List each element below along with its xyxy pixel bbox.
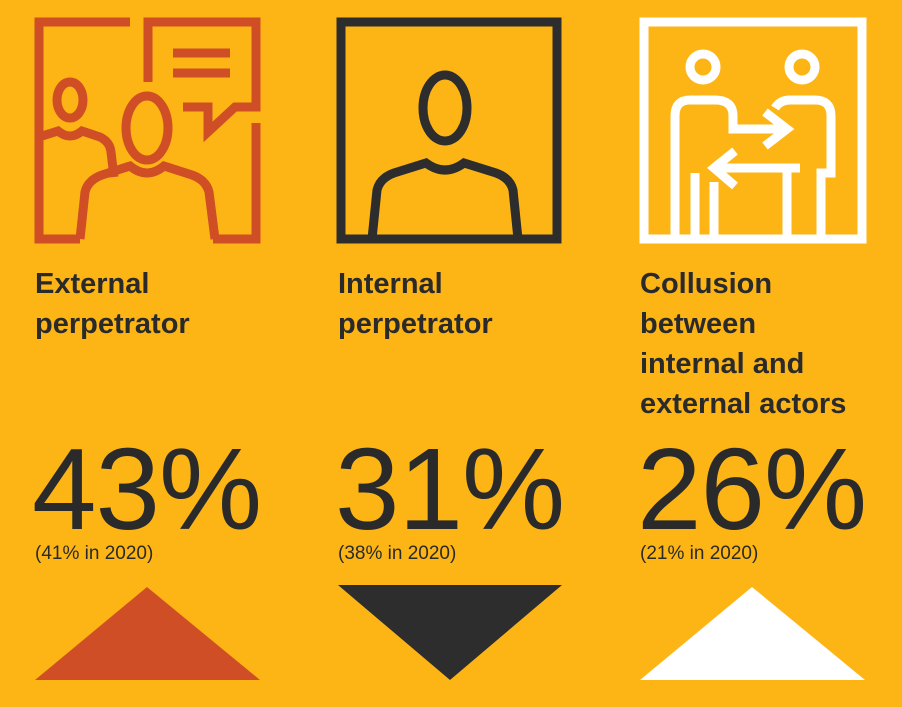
heading: external: perpetrator <box>35 308 190 340</box>
heading: collusion <box>640 268 846 420</box>
heading: internal: perpetrator <box>338 308 493 340</box>
sub: 2020: (21% in 2020) <box>640 543 758 564</box>
sub: 2020: (41% in 2020) <box>35 543 153 564</box>
icon: collusion <box>644 22 862 239</box>
sub: 2020: (38% in 2020) <box>338 543 456 564</box>
heading: internal <box>338 268 493 340</box>
heading: internal: Internal <box>338 268 443 300</box>
heading: external <box>35 268 190 340</box>
heading: collusion: Collusion <box>640 268 772 300</box>
heading: collusion: external actors <box>640 388 846 420</box>
number: 26: 26% <box>637 424 866 554</box>
heading: collusion: internal and <box>640 348 804 380</box>
heading: external: External <box>35 268 149 300</box>
heading: collusion: between <box>640 308 756 340</box>
triangles <box>35 587 260 680</box>
icon: internal perpetrator <box>341 22 557 239</box>
number: 31: 31% <box>335 424 564 554</box>
number: 43: 43% <box>32 424 261 554</box>
